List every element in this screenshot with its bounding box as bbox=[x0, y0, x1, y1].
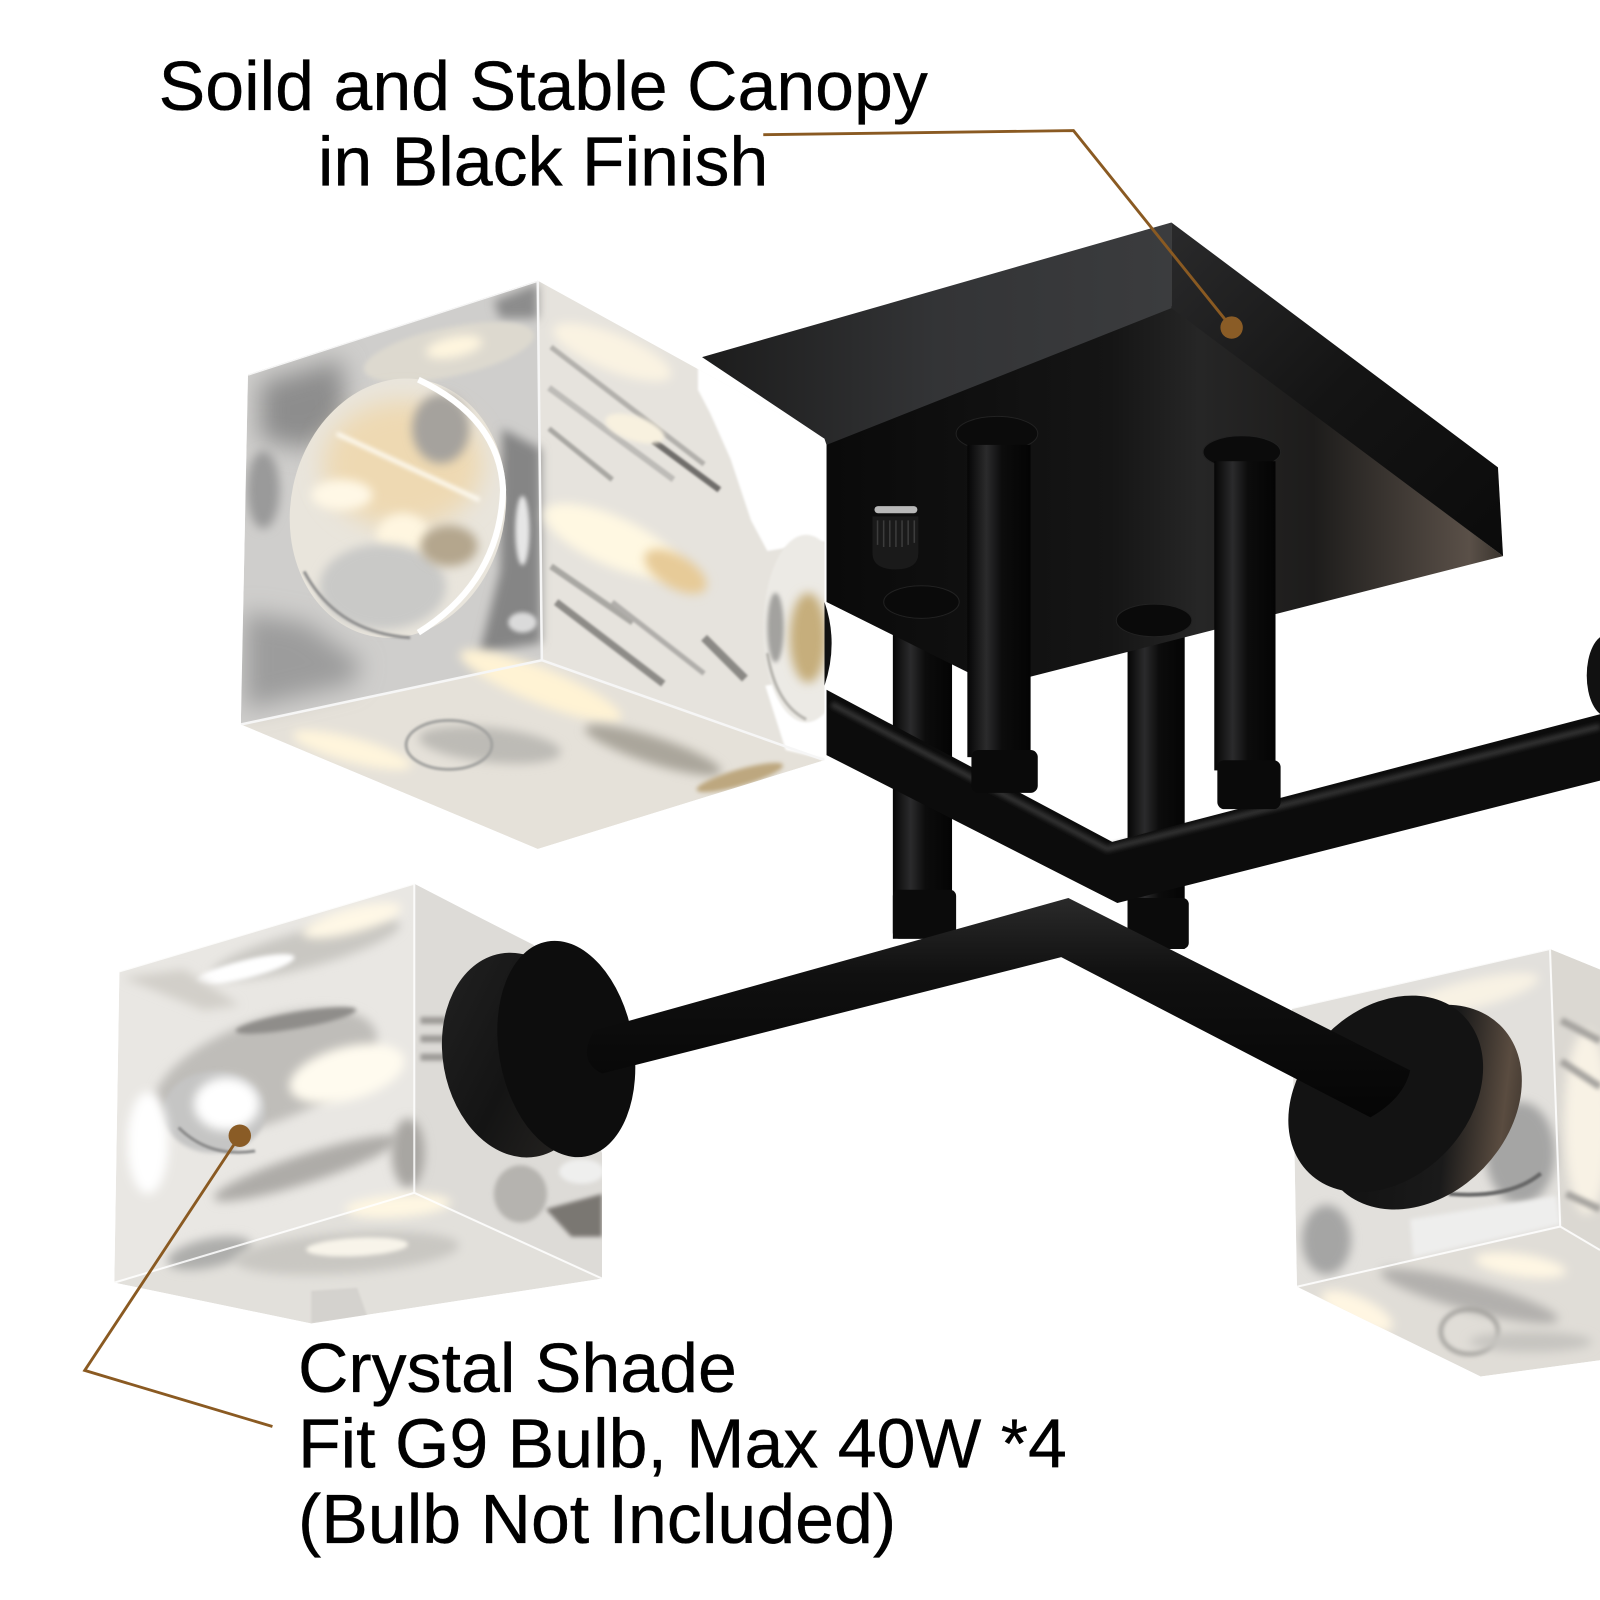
crystal shade: upper left bbox=[241, 281, 849, 849]
overexposed corner bbox=[698, 363, 829, 551]
canopy knob bbox=[872, 506, 918, 569]
canopy leader dot bbox=[1220, 316, 1243, 339]
right face detail bbox=[420, 1020, 447, 1057]
canopy heading: Soild and Stable Canopy bbox=[159, 47, 928, 125]
canopy leader line bbox=[763, 131, 1232, 328]
main round lens bbox=[290, 377, 506, 640]
canopy underside bbox=[827, 306, 1503, 686]
shade leader line bbox=[85, 1136, 272, 1427]
shade leader dot bbox=[229, 1124, 251, 1147]
crystal shade: lower left bbox=[114, 884, 604, 1323]
rear mounting rods bbox=[893, 612, 1189, 949]
shade text line three: (Bulb Not Included) bbox=[298, 1480, 896, 1558]
lower cross arm with wall discs bbox=[426, 898, 1600, 1377]
top lens bbox=[364, 321, 533, 380]
bottom face detail bbox=[344, 1191, 452, 1221]
front mounting rods bbox=[956, 416, 1281, 809]
right wall disc bbox=[1249, 956, 1563, 1250]
right-face streaks bbox=[549, 347, 745, 684]
lower arm tube bbox=[587, 898, 1410, 1117]
canopy heading line two: in Black Finish bbox=[318, 123, 768, 201]
upper arm tube bbox=[827, 635, 1600, 903]
left wall disc bbox=[426, 930, 652, 1170]
crystal shade: lower right bbox=[1292, 949, 1600, 1377]
bottom face bbox=[241, 660, 824, 849]
cube edges bbox=[241, 281, 824, 760]
callout: canopy bbox=[159, 47, 1243, 339]
canopy right band bbox=[1171, 222, 1503, 556]
right face bbox=[538, 281, 824, 760]
bottom-face details bbox=[290, 637, 785, 798]
shade text line two: Fit G9 Bulb, Max 40W *4 bbox=[298, 1404, 1067, 1482]
rear rod flanges bbox=[884, 586, 1192, 637]
capsule lens body bbox=[154, 1005, 380, 1130]
socket ring and brass glimpse bbox=[766, 534, 824, 723]
shade text line one: Crystal Shade bbox=[298, 1329, 737, 1407]
canopy left band bbox=[702, 222, 1171, 445]
callout: crystal shade bbox=[85, 1124, 1067, 1558]
right-face glow bbox=[538, 502, 670, 579]
left face bbox=[241, 281, 542, 724]
disc sliver behind upper shade bbox=[824, 602, 832, 686]
chrome reflections bbox=[245, 284, 541, 709]
top lens bbox=[213, 919, 401, 982]
canopy bbox=[702, 222, 1503, 686]
